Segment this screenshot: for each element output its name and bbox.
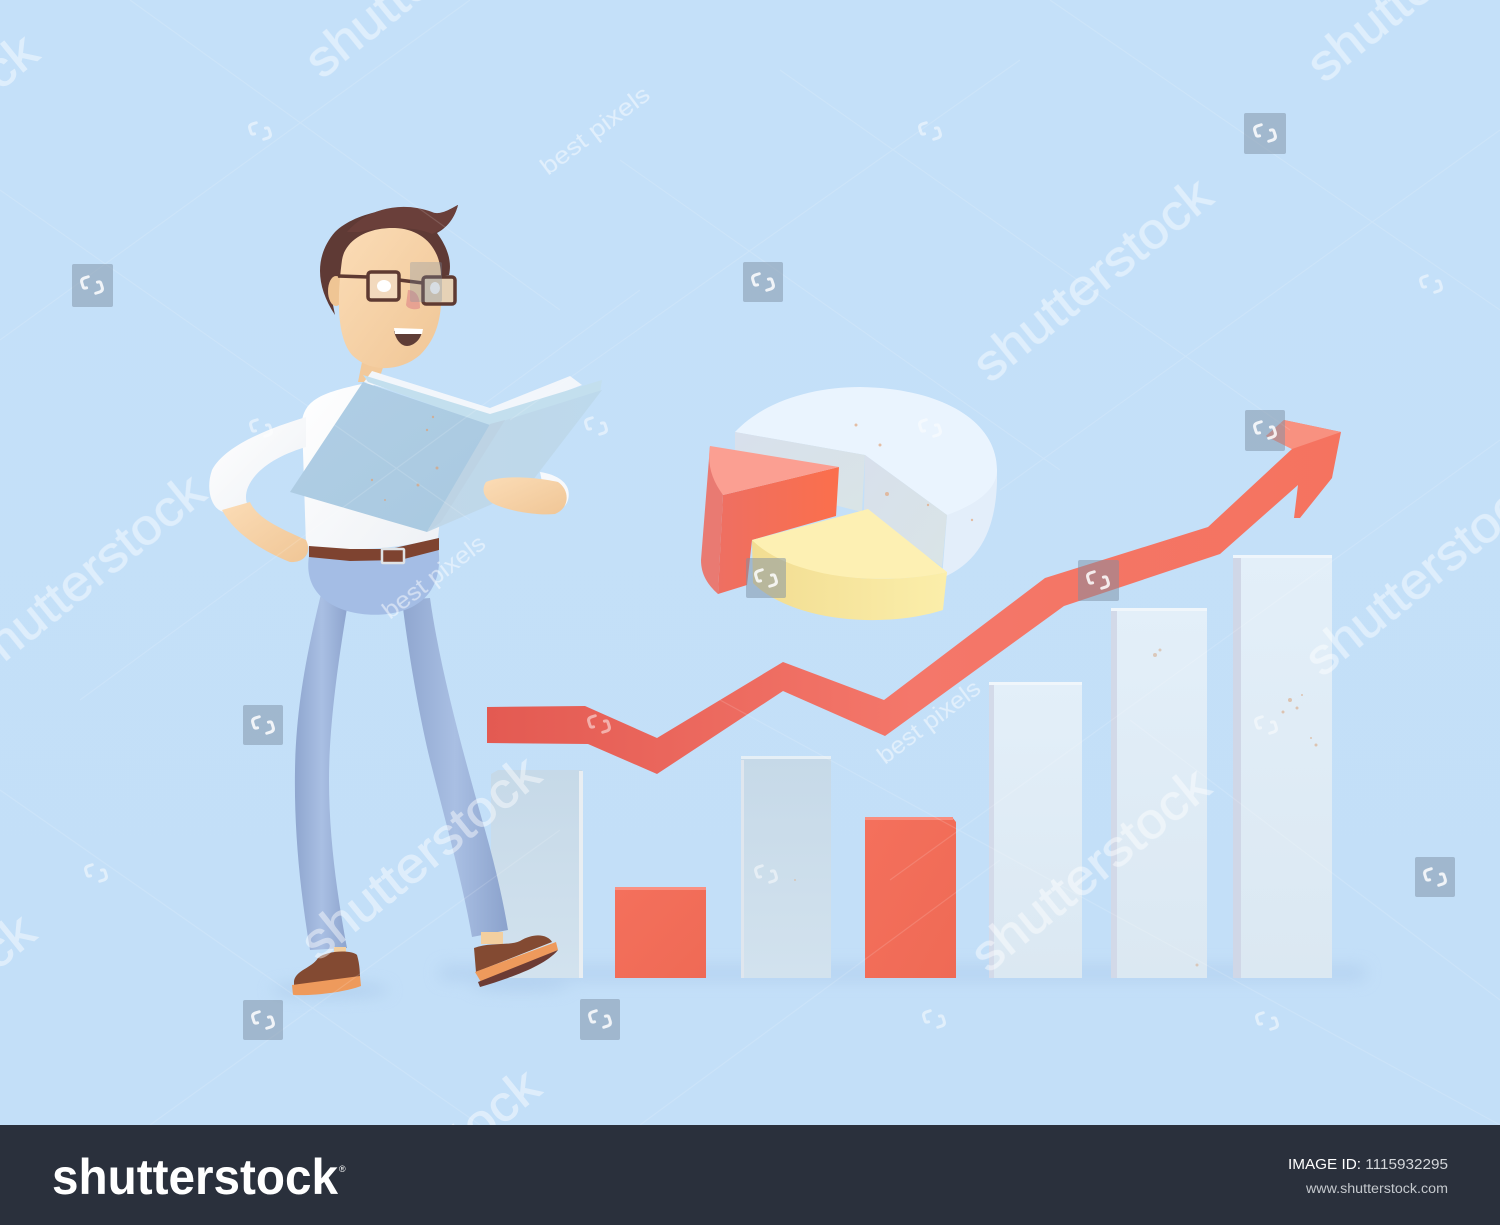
hair top <box>347 205 458 234</box>
pants <box>308 546 439 615</box>
pie chart <box>701 387 997 620</box>
bar 4 red <box>865 817 956 978</box>
watermark: best pixels: best pixels <box>377 530 491 625</box>
torso <box>302 382 440 549</box>
ground shadow <box>270 966 1365 996</box>
bar chart <box>491 555 1332 978</box>
left leg <box>295 590 349 950</box>
ear <box>328 276 344 306</box>
left arm <box>209 417 306 512</box>
footer bar <box>0 1125 1500 1225</box>
head <box>339 228 442 368</box>
footer logo: shutterstock <box>52 1149 338 1205</box>
website: www.shutterstock.com <box>1305 1181 1448 1196</box>
arrow <box>487 420 1341 774</box>
eyes <box>377 280 391 292</box>
watermark: square badges <box>72 113 1455 1040</box>
watermark: best pixels: best pixels <box>872 675 986 770</box>
right leg <box>402 598 508 937</box>
nose <box>406 290 420 309</box>
bar 2 red <box>615 887 706 978</box>
bar 6 <box>1111 608 1207 978</box>
mouth <box>394 328 423 346</box>
character <box>209 205 602 995</box>
glasses <box>338 272 455 304</box>
bar specks <box>794 648 1198 966</box>
watermark: best pixels <box>377 81 986 770</box>
watermark: shutterstock text: shutterstock <box>290 744 551 971</box>
right hand <box>484 477 567 514</box>
watermark: shutterstock text: shutterstock <box>962 166 1223 393</box>
belt <box>309 538 439 563</box>
pie top <box>735 387 997 515</box>
yellow slice <box>752 509 947 620</box>
bar 7 <box>1233 555 1332 978</box>
registered mark: ® <box>339 1164 346 1174</box>
red slice <box>701 446 839 594</box>
inner face right <box>864 455 947 567</box>
bar 3 <box>741 756 831 978</box>
pie specks <box>854 424 973 521</box>
image id: IMAGE ID: 1115932295 <box>1288 1156 1448 1173</box>
bar 5 <box>989 682 1082 978</box>
left forearm <box>222 502 308 562</box>
neck <box>358 362 385 382</box>
bar 1 <box>491 770 583 978</box>
right shoe <box>474 932 558 987</box>
pie body side <box>942 470 997 578</box>
hair back <box>320 205 458 315</box>
right cuff <box>540 472 569 512</box>
small badge icons <box>85 120 1442 1032</box>
badge icons <box>81 122 1446 1031</box>
left shoe <box>292 947 361 995</box>
book <box>290 371 602 532</box>
inner face left <box>735 432 865 512</box>
watermark: best pixels: best pixels <box>535 81 655 181</box>
watermark: shutterstock text: shutterstock <box>960 756 1221 983</box>
